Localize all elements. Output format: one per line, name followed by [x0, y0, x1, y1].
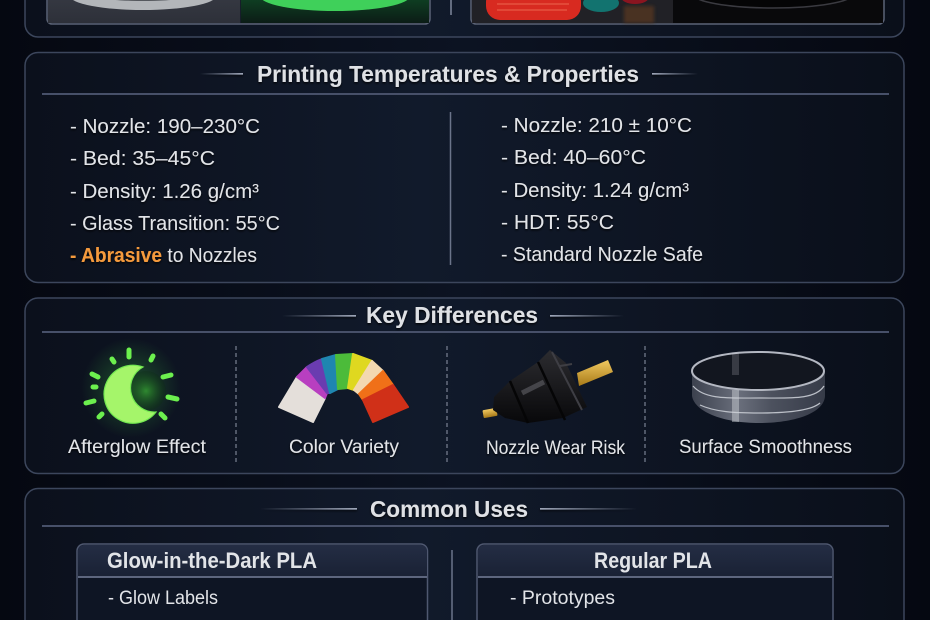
text block: regular PLA properties: - Standard Nozzle Safe: [501, 244, 703, 266]
text block: regular PLA properties: - Bed: 40–60°C: [501, 147, 646, 169]
text block: glow PLA properties: [70, 116, 280, 267]
icon: afterglow moon: [81, 338, 181, 438]
panel: material photos: [25, 0, 904, 37]
list item: - Glow Labels: [108, 588, 218, 609]
text block: regular PLA properties: - Nozzle: 210 ± 10°C: [501, 115, 692, 137]
divider: uses columns: [451, 550, 453, 620]
icon: color variety rainbow: [279, 354, 408, 422]
text block: regular PLA properties: [501, 115, 703, 266]
text block: glow PLA properties: - Glass Transition: 55°C: [70, 213, 280, 235]
text block: glow PLA properties: - Bed: 35–45°C: [70, 148, 215, 170]
divider: photos: [450, 0, 452, 15]
panel: common uses: [25, 488, 904, 620]
photo card: glow-in-the-dark PLA: [47, 0, 430, 24]
heading: printing temperatures and properties: Printing Temperatures & Properties: [257, 61, 639, 87]
card: regular PLA uses: [477, 544, 833, 620]
panel: key differences: [25, 298, 904, 474]
card heading: Glow-in-the-Dark PLA: [107, 548, 317, 573]
label: surface smoothness: Surface Smoothness: [679, 437, 852, 458]
label: color variety: Color Variety: [289, 437, 400, 458]
label: nozzle wear risk: Nozzle Wear Risk: [486, 438, 625, 459]
label: afterglow effect: Afterglow Effect: [68, 437, 207, 458]
text block: regular PLA properties: - HDT: 55°C: [501, 212, 614, 234]
text block: glow PLA properties: - Density: 1.26 g/cm³: [70, 181, 259, 203]
text block: glow PLA properties: - Abrasive to Nozzles: [70, 245, 257, 267]
icon: smooth clear ring: [692, 352, 825, 423]
divider: properties columns: [450, 112, 452, 265]
panel: printing temperatures and properties: [25, 52, 904, 282]
heading: common uses: Common Uses: [370, 496, 528, 522]
heading: key differences: Key Differences: [366, 302, 538, 328]
photo card: regular PLA: [471, 0, 884, 24]
list item: - Prototypes: [510, 588, 615, 609]
card: glow-in-the-dark PLA uses: [77, 544, 428, 620]
icon: nozzle: [482, 350, 613, 423]
text block: regular PLA properties: - Density: 1.24 g/cm³: [501, 180, 689, 202]
text block: glow PLA properties: - Nozzle: 190–230°C: [70, 116, 260, 138]
card heading: Regular PLA: [594, 548, 712, 573]
